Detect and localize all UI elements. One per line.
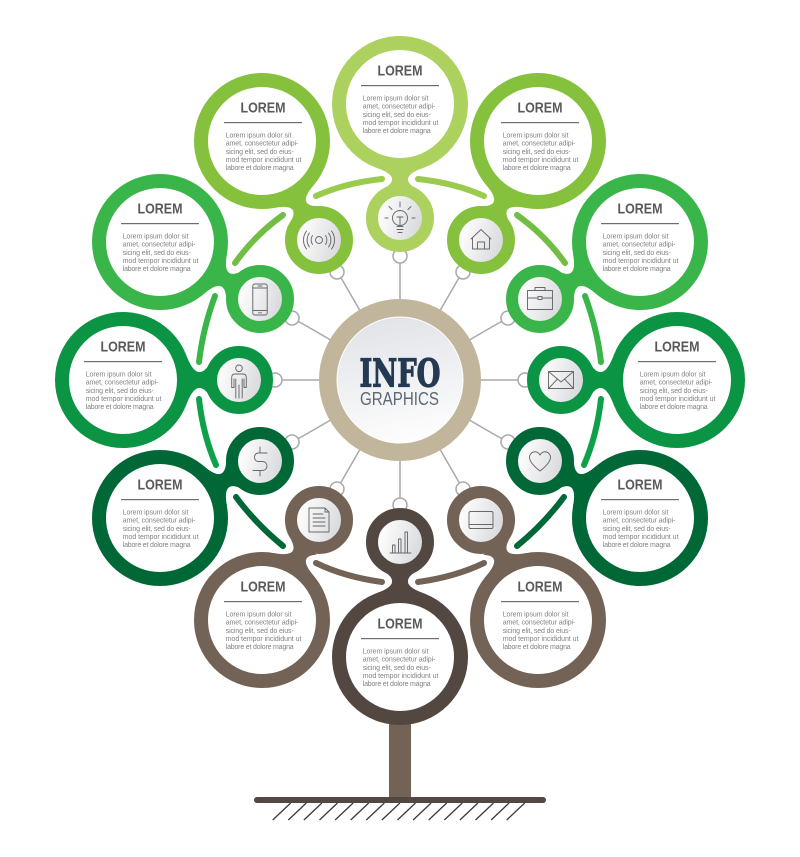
text: lower right: Lorem ipsum dolor sit <box>603 510 668 516</box>
text: top: mod tempor incididunt ut <box>363 120 438 127</box>
text: bottom right: Lorem ipsum dolor sit <box>503 612 568 618</box>
panel: lower left branch <box>99 433 288 579</box>
text: second right: labore et dolore magna <box>603 266 671 273</box>
text: bottom right: mod tempor incididunt ut <box>503 636 578 643</box>
text: middle right: mod tempor incididunt ut <box>640 396 715 403</box>
text: second left <box>121 201 199 273</box>
text: bottom: labore et dolore magna <box>363 681 431 688</box>
text: second left: Lorem ipsum dolor sit <box>123 234 188 240</box>
text: upper right: sicing elit, sed do eius- <box>503 149 571 156</box>
text: lower right: labore et dolore magna <box>603 542 671 549</box>
icon: envelope <box>548 372 574 388</box>
text: middle left <box>84 339 162 411</box>
text: upper left: LOREM <box>240 100 286 117</box>
icon: document <box>309 508 329 532</box>
text: second left: sicing elit, sed do eius- <box>123 250 191 257</box>
text: lower right: amet, consectetur adipi- <box>603 518 676 525</box>
text: bottom: sicing elit, sed do eius- <box>363 665 431 672</box>
text: lower right: mod tempor incididunt ut <box>603 534 678 541</box>
text: upper left: Lorem ipsum dolor sit <box>226 132 291 140</box>
text: lower right <box>601 477 679 549</box>
text: upper right: Lorem ipsum dolor sit <box>503 132 568 140</box>
central hub <box>328 308 472 452</box>
text: bottom left: amet, consectetur adipi- <box>226 620 299 627</box>
panel: upper right branch <box>453 80 599 268</box>
text: middle left: LOREM <box>100 339 146 356</box>
text: middle left: Lorem ipsum dolor sit <box>86 372 151 378</box>
text: second right <box>601 201 679 273</box>
text: lower left: LOREM <box>138 477 182 494</box>
text: upper left: amet, consectetur adipi- <box>226 141 299 148</box>
text: bottom left <box>224 579 302 651</box>
text: lower right: LOREM <box>618 477 662 494</box>
text: upper left <box>224 100 302 172</box>
panel: upper left branch <box>201 80 347 268</box>
icon: dollar <box>253 447 267 476</box>
text: bottom left: labore et dolore magna <box>226 644 294 651</box>
text: upper left: sicing elit, sed do eius- <box>226 149 294 156</box>
text: lower left <box>121 477 199 549</box>
text: upper right <box>501 100 579 172</box>
icon: bar chart <box>390 532 411 553</box>
text: bottom right: LOREM <box>518 579 562 596</box>
text: middle left: amet, consectetur adipi- <box>86 380 159 387</box>
text: upper left: mod tempor incididunt ut <box>226 157 301 164</box>
text: second right: sicing elit, sed do eius- <box>603 250 671 257</box>
icon: briefcase <box>528 288 552 310</box>
text: top: Lorem ipsum dolor sit <box>363 96 428 102</box>
text: upper left: labore et dolore magna <box>226 165 294 172</box>
text: middle right: amet, consectetur adipi- <box>640 380 713 387</box>
panel: second right branch <box>512 181 701 327</box>
panel: bottom left branch <box>201 492 347 681</box>
text: middle right <box>638 339 716 411</box>
text: second right: Lorem ipsum dolor sit <box>603 234 668 240</box>
text: bottom right: amet, consectetur adipi- <box>503 620 576 627</box>
text: middle right: Lorem ipsum dolor sit <box>640 372 705 378</box>
panel: middle left branch <box>62 319 267 441</box>
text: second right: mod tempor incididunt ut <box>603 258 678 265</box>
icon: heart <box>530 452 550 471</box>
text: bottom: LOREM <box>378 616 422 633</box>
trunk <box>389 720 411 799</box>
text: bottom <box>361 616 439 688</box>
title: INFO: INFO <box>360 350 440 396</box>
icon: tablet <box>469 512 493 528</box>
text: bottom: Lorem ipsum dolor sit <box>363 648 428 656</box>
icon: phone <box>253 284 267 315</box>
panel: bottom branch <box>339 514 461 718</box>
text: middle left: sicing elit, sed do eius- <box>86 388 154 395</box>
panel: top branch <box>339 43 461 246</box>
text: lower left: sicing elit, sed do eius- <box>123 526 191 533</box>
text: bottom left: sicing elit, sed do eius- <box>226 628 294 635</box>
text: second left: amet, consectetur adipi- <box>123 242 196 249</box>
subtitle: GRAPHICS: GRAPHICS <box>360 389 439 409</box>
icon: person <box>232 365 246 398</box>
icon: house <box>471 230 491 249</box>
text: middle left: mod tempor incididunt ut <box>86 396 161 403</box>
text: top: amet, consectetur adipi- <box>363 104 436 111</box>
text: lower left: Lorem ipsum dolor sit <box>123 510 188 516</box>
text: bottom: amet, consectetur adipi- <box>363 657 436 664</box>
text: lower left: amet, consectetur adipi- <box>123 518 196 525</box>
text: second right: LOREM <box>618 201 662 218</box>
text: bottom right: labore et dolore magna <box>503 644 571 651</box>
panel: lower right branch <box>512 433 701 579</box>
panel: middle right branch <box>533 319 738 441</box>
text: second left: labore et dolore magna <box>123 266 191 273</box>
text: bottom: mod tempor incididunt ut <box>363 673 438 680</box>
text: second right: amet, consectetur adipi- <box>603 242 676 249</box>
text: middle left: labore et dolore magna <box>86 404 154 411</box>
icon: light bulb <box>385 202 415 232</box>
text: upper right: LOREM <box>518 100 562 117</box>
connectors to centre <box>268 249 532 512</box>
text: top: LOREM <box>378 63 422 80</box>
text: top: sicing elit, sed do eius- <box>363 112 431 119</box>
text: middle right: labore et dolore magna <box>640 404 708 411</box>
text: middle right: LOREM <box>654 339 700 356</box>
ground <box>254 797 546 820</box>
text: second left: LOREM <box>138 201 182 218</box>
text: middle right: sicing elit, sed do eius- <box>640 388 708 395</box>
text: upper right: labore et dolore magna <box>503 165 571 172</box>
text: lower right: sicing elit, sed do eius- <box>603 526 671 533</box>
text: bottom right: sicing elit, sed do eius- <box>503 628 571 635</box>
text: top: labore et dolore magna <box>363 128 431 135</box>
panel: second left branch <box>99 181 288 327</box>
text: bottom left: mod tempor incididunt ut <box>226 636 301 643</box>
text: lower left: mod tempor incididunt ut <box>123 534 198 541</box>
text: second left: mod tempor incididunt ut <box>123 258 198 265</box>
text: upper right: amet, consectetur adipi- <box>503 141 576 148</box>
text: lower left: labore et dolore magna <box>123 542 191 549</box>
text: bottom right <box>501 579 579 651</box>
text: bottom left: Lorem ipsum dolor sit <box>226 612 291 618</box>
icon: signal waves <box>304 231 334 249</box>
text: upper right: mod tempor incididunt ut <box>503 157 578 164</box>
panel: bottom right branch <box>453 492 599 681</box>
text: bottom left: LOREM <box>240 579 286 596</box>
text: top <box>361 63 439 135</box>
curved arcs between branches <box>199 179 601 582</box>
